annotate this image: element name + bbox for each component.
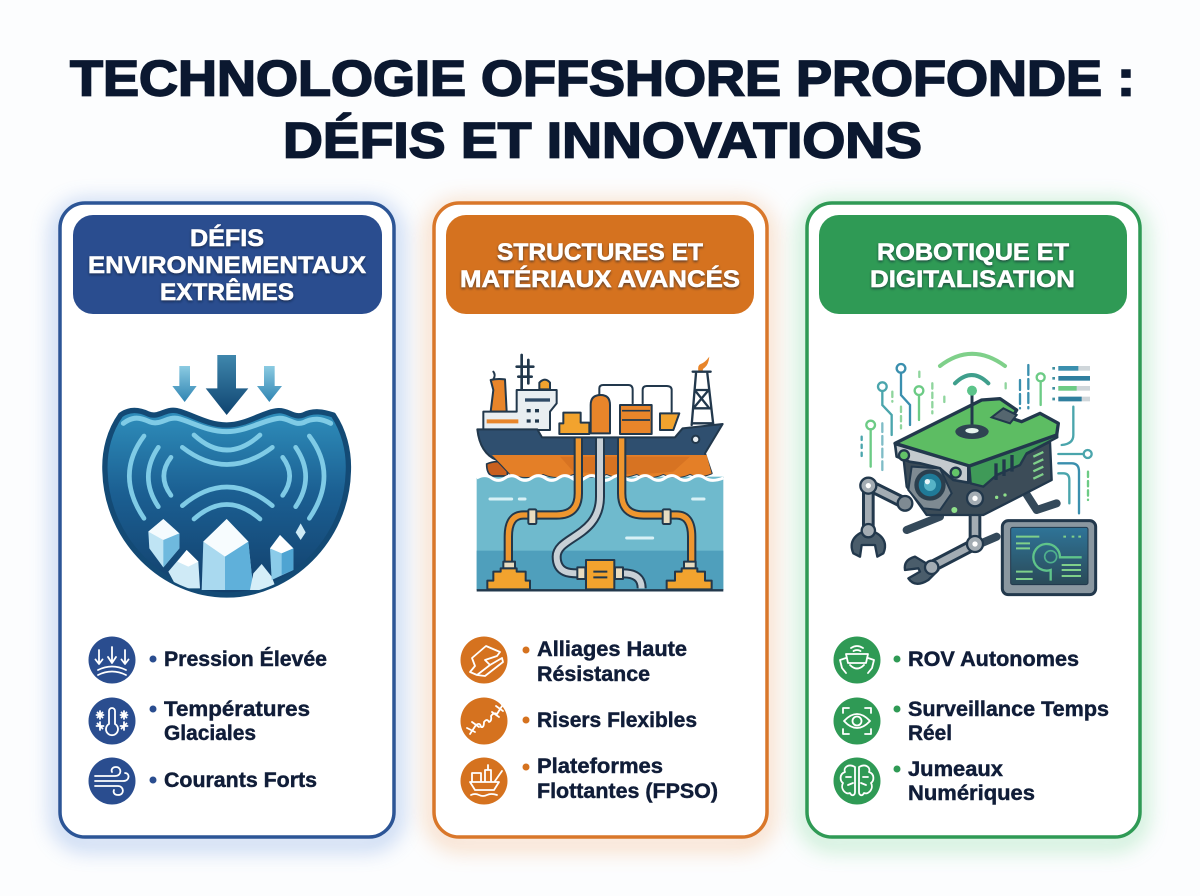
bullet text: alliages: Alliages Haute <box>537 638 687 661</box>
panel: robotique et digitalisation <box>806 203 1140 843</box>
bullet text: surveillance: Surveillance Temps <box>908 698 1109 721</box>
bullet text: températures glaciales: Températures <box>164 698 310 721</box>
heading: robotique <box>819 215 1127 314</box>
bullet text: alliages: Résistance <box>537 663 650 686</box>
panel: défis environnementaux <box>59 203 395 843</box>
bullet text: jumeaux: Jumeaux <box>908 758 1003 781</box>
heading: structures <box>446 215 754 314</box>
heading: défis: ENVIRONNEMENTAUX <box>88 252 366 279</box>
heading: défis <box>73 215 382 314</box>
bullet text: températures glaciales <box>150 698 310 745</box>
bullet text: ROV: ROV Autonomes <box>908 648 1079 671</box>
icon: ROV <box>834 636 880 684</box>
heading: structures: MATÉRIAUX AVANCÉS <box>460 265 740 293</box>
heading: défis: DÉFIS <box>190 224 264 252</box>
bullet text: plateformes: Flottantes (FPSO) <box>537 780 718 803</box>
bullet text: jumeaux <box>894 758 1035 805</box>
illustration: pression sur océan et glace <box>105 355 348 595</box>
icon: plateforme <box>460 758 508 804</box>
heading: structures: STRUCTURES ET <box>497 239 703 266</box>
heading: robotique: ROBOTIQUE ET <box>877 239 1069 266</box>
bullet text: plateformes <box>522 755 718 803</box>
list: défis <box>88 636 327 804</box>
panel: structures et matériaux <box>433 203 767 843</box>
bullet text: courants forts: Courants Forts <box>164 769 317 792</box>
bullet text: surveillance <box>894 698 1109 745</box>
bullet text: surveillance: Réel <box>908 722 952 745</box>
icon: températures <box>88 698 136 744</box>
illustration: robot ROV <box>852 354 1096 595</box>
title <box>70 50 1135 168</box>
icon: pression <box>88 636 136 684</box>
list: structures <box>460 636 718 804</box>
list: robotique <box>834 636 1109 805</box>
bullet text: alliages <box>522 638 687 686</box>
bullet text: pression élevée: Pression Élevée <box>164 648 327 671</box>
icon: cerveau <box>834 758 880 804</box>
title: TECHNOLOGIE OFFSHORE PROFONDE : <box>70 50 1135 106</box>
icon: risers <box>460 698 508 744</box>
icon: alliages <box>460 636 508 684</box>
icon: courants <box>88 758 136 804</box>
heading: défis: EXTRÊMES <box>160 278 294 306</box>
bullet text: jumeaux: Numériques <box>908 782 1035 805</box>
title: DÉFIS ET INNOVATIONS <box>283 112 922 168</box>
illustration: navire FPSO et risers <box>477 355 723 590</box>
heading: robotique: DIGITALISATION <box>870 266 1075 293</box>
icon: surveillance <box>834 698 880 744</box>
bullet text: risers: Risers Flexibles <box>537 709 697 732</box>
bullet text: températures glaciales: Glaciales <box>164 722 256 745</box>
bullet text: plateformes: Plateformes <box>537 755 663 778</box>
